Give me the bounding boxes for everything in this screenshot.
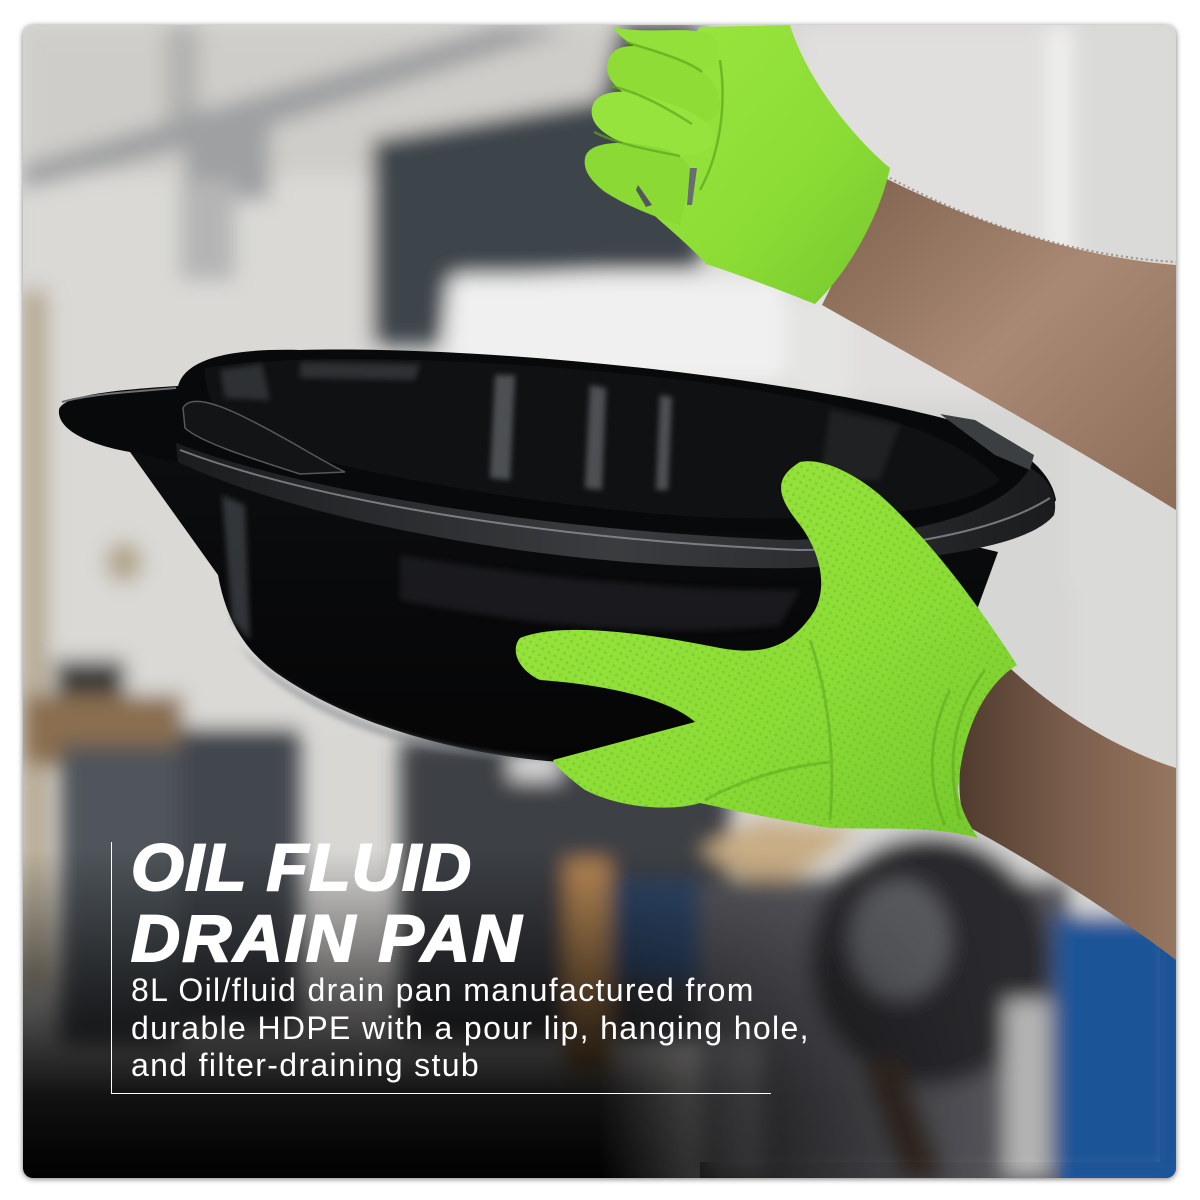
text block: description bbox=[131, 972, 810, 1083]
glove: upper finger creases bbox=[594, 42, 723, 190]
pan: back latch bbox=[940, 414, 1034, 470]
glove: pan hook glints bbox=[636, 185, 652, 207]
rule: left and bottom lines bbox=[111, 842, 771, 1094]
arm: upper hair edge bbox=[890, 178, 1176, 262]
gradient: dark fade at the bottom behind the caption bbox=[23, 859, 970, 1178]
glove: little finger bbox=[585, 143, 691, 225]
glove: lower grip texture bbox=[516, 461, 1017, 838]
pan: pour handle grip bbox=[183, 401, 345, 474]
pan: handle and back rim bbox=[59, 350, 1056, 540]
arm: lower forearm bbox=[959, 668, 1176, 960]
glove: back of hand bbox=[640, 25, 890, 304]
glove: ring finger bbox=[592, 92, 714, 154]
pan: outer wall reflections bbox=[222, 495, 800, 760]
glove: index finger bbox=[612, 27, 719, 72]
pan: handle highlight bbox=[62, 388, 176, 402]
pan: inner reflections bbox=[220, 362, 900, 490]
pan: lower body bbox=[130, 430, 998, 762]
heading: OIL FLUID bbox=[131, 830, 472, 904]
glove: middle finger bbox=[607, 46, 720, 125]
arm: upper forearm bbox=[822, 178, 1176, 510]
caption block with L-shaped rule bbox=[111, 830, 810, 1094]
glove: upper hand bbox=[585, 25, 890, 304]
text block: description: 8L Oil/fluid drain pan manufactured from bbox=[131, 972, 755, 1008]
drain pan bbox=[59, 350, 1056, 762]
glove: wrist folds bbox=[705, 640, 985, 825]
glove: lower hand bbox=[516, 461, 1017, 838]
heading bbox=[131, 830, 524, 975]
heading: DRAIN PAN bbox=[131, 901, 524, 975]
pan: inner wall bbox=[205, 359, 1000, 518]
text block: description: and filter-draining stub bbox=[131, 1047, 480, 1083]
pan: front rim bbox=[176, 443, 1055, 568]
text block: description: durable HDPE with a pour lip, hanging hole, bbox=[131, 1010, 810, 1046]
